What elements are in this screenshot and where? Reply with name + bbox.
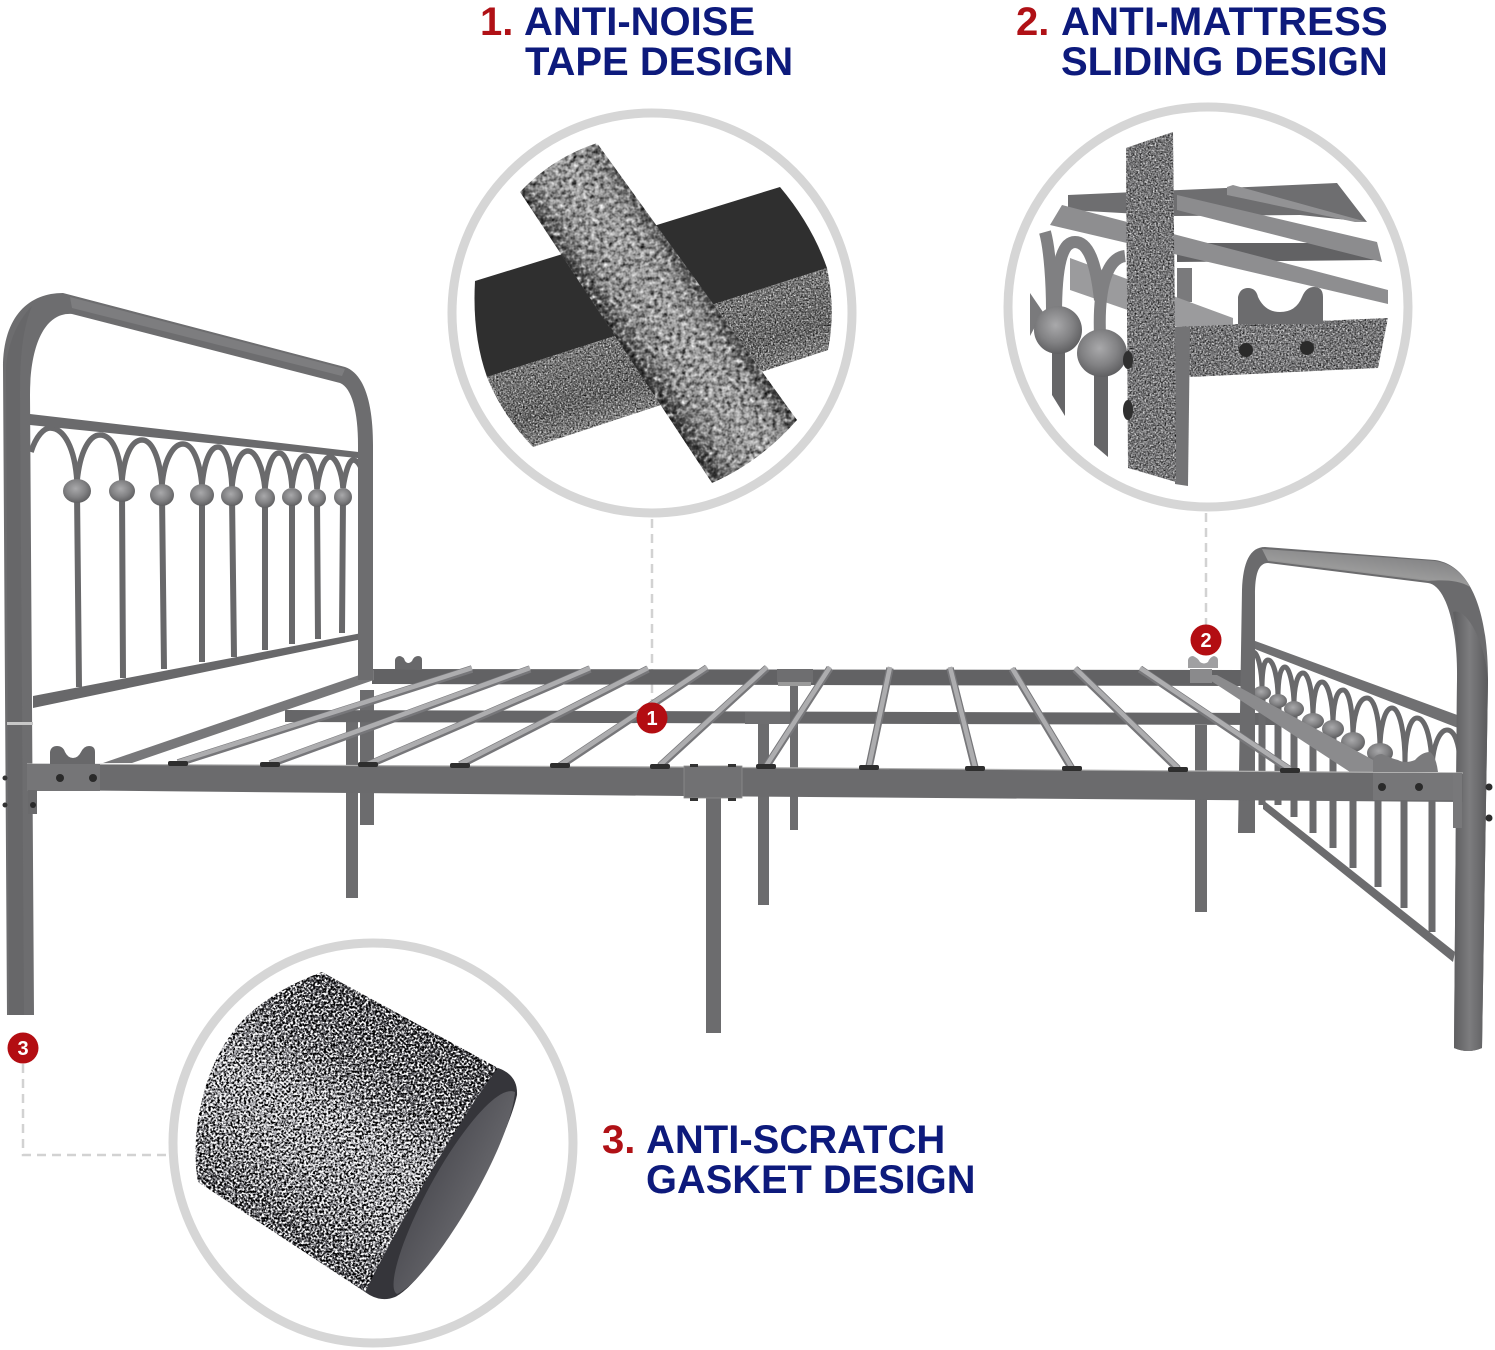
rear post (1175, 327, 1190, 486)
rubber gasket ring (365, 1068, 517, 1299)
slat rubber pads (168, 761, 1300, 773)
heading: anti-mattress sliding design (1016, 0, 1388, 84)
vertical bars (1052, 350, 1065, 416)
heading: anti-scratch gasket design: ANTI-SCRATCH (646, 1118, 945, 1162)
centre rail (285, 710, 1275, 725)
headboard lower bar (33, 632, 367, 708)
footboard verticals (1262, 693, 1432, 932)
front rail (27, 764, 1463, 802)
decorative balls (1030, 293, 1127, 377)
footboard (1238, 547, 1492, 1051)
front left bracket (27, 746, 100, 814)
crossing tube (520, 143, 797, 483)
footboard tube (1238, 547, 1488, 1051)
headboard arches (31, 428, 366, 492)
gasket cap (394, 1091, 515, 1294)
heading: anti-scratch gasket design: 3. (602, 1118, 635, 1162)
headboard silver ring (7, 722, 33, 725)
marker 2: 2 (1200, 630, 1212, 652)
headboard tube (3, 293, 373, 1015)
slats (178, 667, 1290, 770)
footboard side fasteners (1486, 784, 1492, 822)
side rail left (103, 670, 374, 763)
front right bracket (1373, 752, 1462, 828)
heading: anti-scratch gasket design (602, 1118, 975, 1202)
dark taped bar face (474, 187, 827, 377)
detail circle 3: anti-scratch gasket (173, 943, 573, 1343)
main tube (1126, 132, 1176, 482)
textured bar side (487, 268, 832, 447)
front slat (1050, 205, 1388, 304)
back and centre legs (346, 685, 1207, 1033)
footboard arches (1248, 652, 1460, 772)
slat tops (178, 667, 1290, 769)
footboard upper bar (1247, 638, 1460, 728)
heading: anti-noise tape design: 1. (480, 0, 513, 44)
headboard balls (63, 479, 352, 508)
heading: anti-noise tape design (480, 0, 793, 84)
centre rail (1177, 243, 1380, 262)
arches (1045, 232, 1125, 335)
heading: anti-scratch gasket design: GASKET DESIGN (646, 1158, 975, 1202)
side rail (1070, 258, 1233, 328)
side rail right (1202, 675, 1377, 772)
heading: anti-mattress sliding design: SLIDING DESIGN (1061, 40, 1388, 84)
heading: anti-noise tape design: ANTI-NOISE (524, 0, 755, 44)
bed frame illustration (2, 293, 1492, 1051)
back left bracket (395, 656, 422, 669)
heading: anti-noise tape design: TAPE DESIGN (525, 40, 793, 84)
back rail connector (745, 669, 813, 724)
rear rail (1068, 183, 1367, 222)
tube bolts (1123, 351, 1133, 420)
middle slat (1177, 195, 1382, 262)
anti-slide plate (1238, 287, 1323, 324)
centre connector (684, 764, 742, 801)
heading: anti-mattress sliding design: 2. (1016, 0, 1049, 44)
footboard lower bar (1263, 800, 1455, 962)
plate bolts (1239, 341, 1314, 357)
heading: anti-mattress sliding design: ANTI-MATTRESS (1061, 0, 1388, 44)
headboard upper bar (30, 414, 367, 459)
slat edges (178, 668, 1290, 770)
front rail (1177, 318, 1388, 377)
headboard verticals (77, 491, 343, 687)
small leg (1177, 268, 1192, 302)
back rail (372, 669, 1242, 686)
marker 3: 3 (17, 1038, 29, 1060)
detail circle 1: anti-noise tape (452, 113, 852, 513)
rear slat (1227, 185, 1367, 222)
speckled tube (196, 972, 498, 1292)
marker 2 (1190, 624, 1222, 656)
marker 1: 1 (646, 708, 658, 730)
detail circle 2: anti-sliding bracket (1008, 107, 1408, 507)
headboard side fasteners (2, 776, 8, 808)
headboard (2, 293, 373, 1015)
dashed leader lines (23, 513, 1206, 1155)
back right bracket (1188, 656, 1218, 683)
marker 3 (8, 1032, 38, 1064)
marker 1 (636, 702, 668, 734)
footboard balls (1253, 686, 1393, 763)
